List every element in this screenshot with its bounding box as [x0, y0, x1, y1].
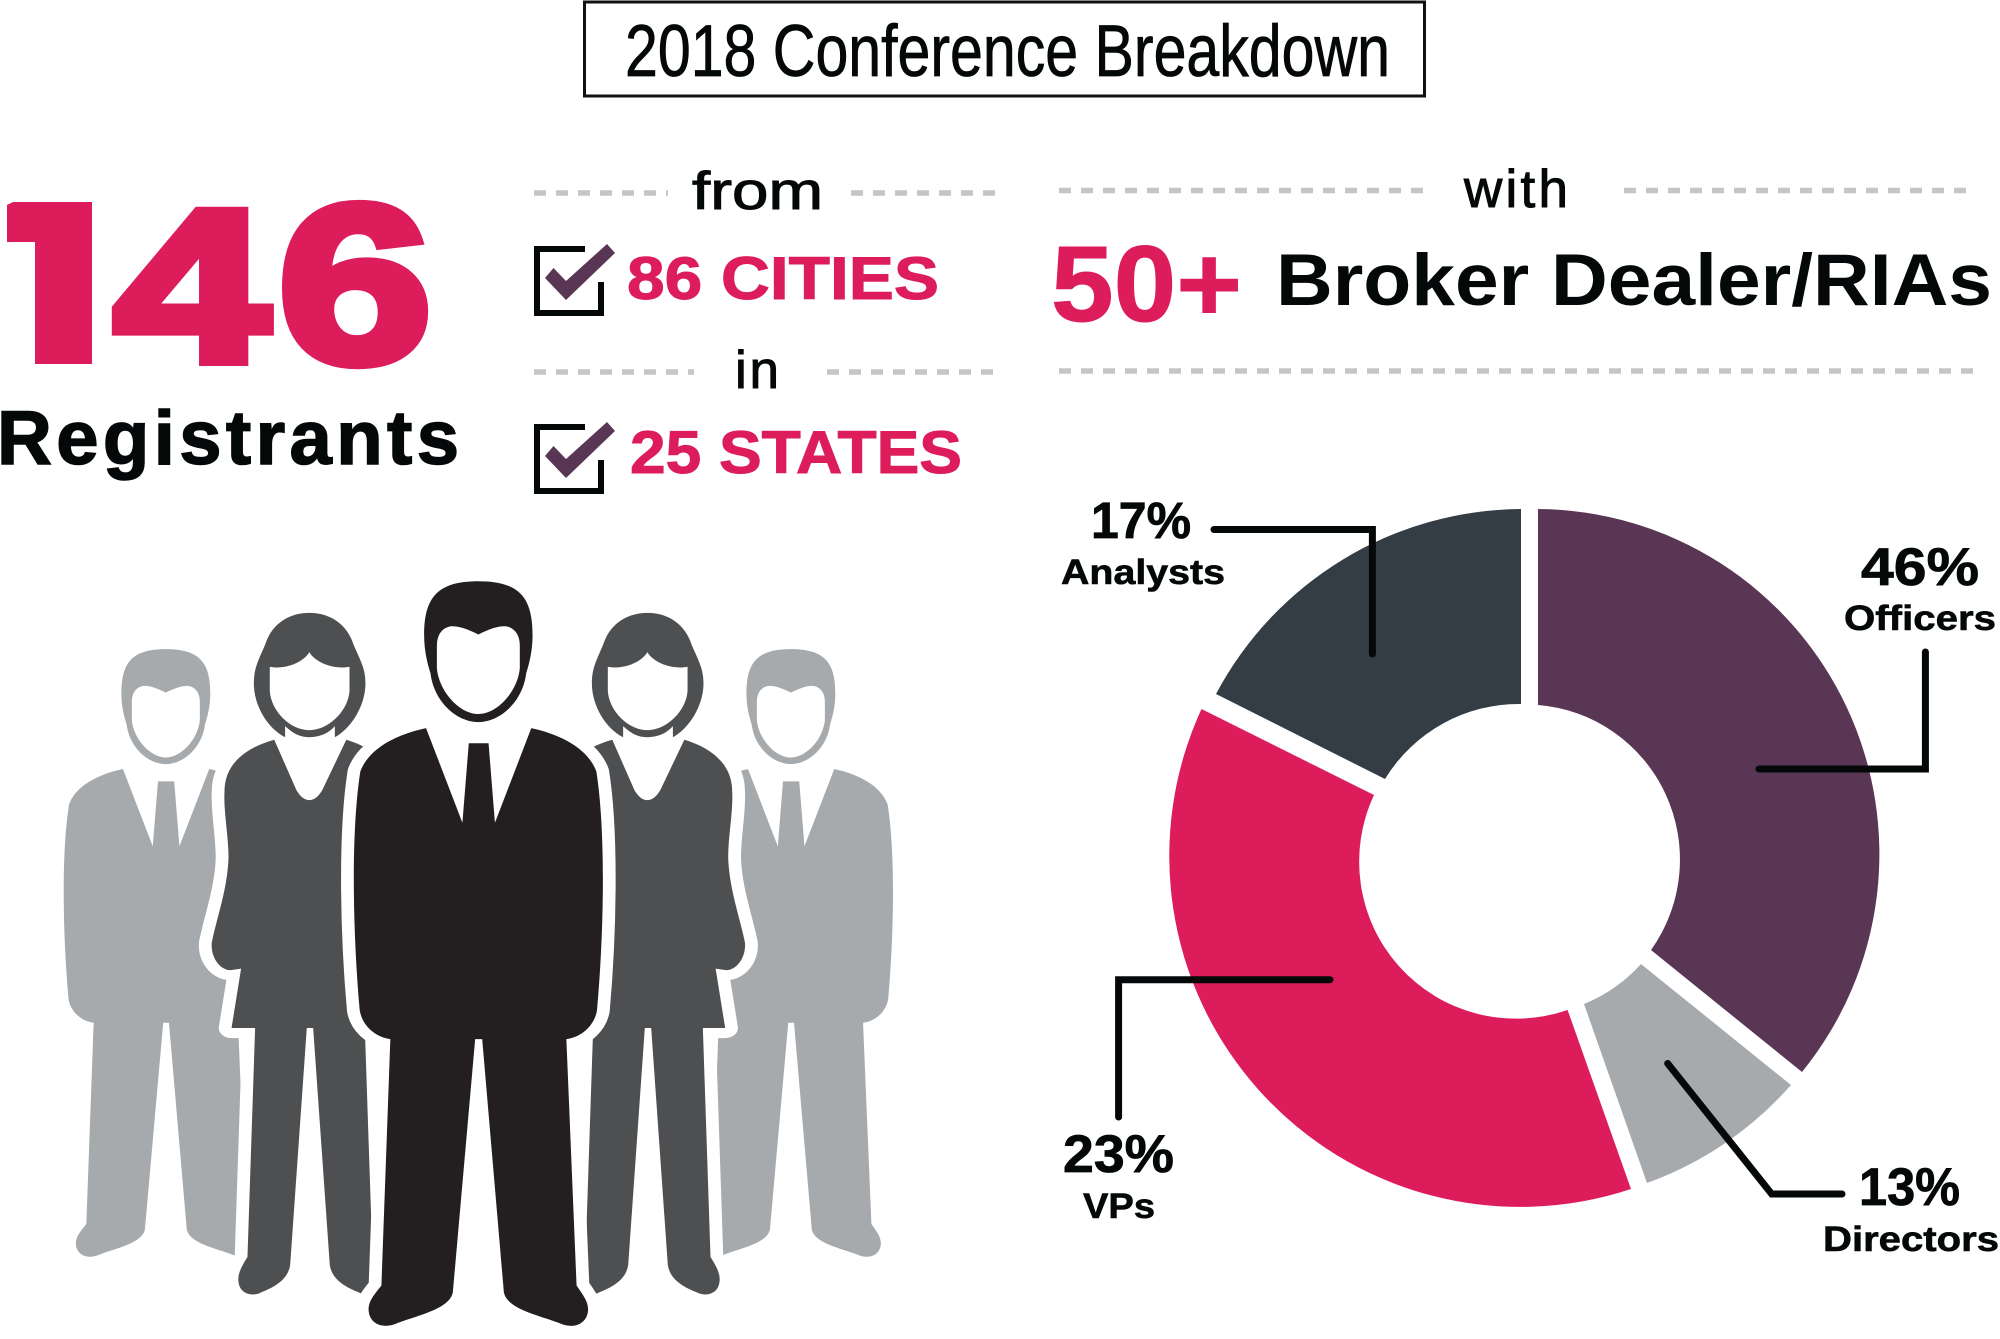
callout line: analysts [1214, 530, 1372, 654]
label: 46% officers [1844, 538, 1996, 638]
text: from: from [692, 162, 823, 221]
label: 23% vps [1063, 1125, 1174, 1226]
segment: vps [1169, 709, 1631, 1207]
text: with: with [1463, 160, 1568, 219]
stat: 86 cities: 86 CITIES [627, 245, 939, 312]
dashed divider: lower [1059, 368, 1976, 374]
label: 17% analysts: 17% [1091, 492, 1191, 549]
person: left woman [212, 613, 407, 1294]
stat: 146 registrants: Registrants [0, 396, 459, 481]
icon: group of business people [64, 581, 893, 1326]
label: 13% directors: Directors [1823, 1220, 1999, 1259]
label: 23% vps: 23% [1063, 1125, 1174, 1184]
dashed divider: from [534, 190, 1001, 196]
person: right woman [550, 613, 745, 1294]
label: 23% vps: VPs [1083, 1187, 1155, 1226]
icon: checkbox states [537, 422, 615, 491]
stat: 146 registrants [1, 200, 457, 481]
label: 13% directors: 13% [1859, 1158, 1960, 1217]
segment: directors [1584, 964, 1791, 1183]
donut chart [1061, 492, 1999, 1259]
label: 46% officers: 46% [1861, 538, 1979, 597]
segment: officers [1538, 509, 1879, 1072]
callout line: officers [1759, 652, 1925, 769]
segment: analysts [1216, 509, 1521, 779]
stat: 146 registrants: 6 [278, 158, 432, 410]
person: center man [354, 581, 603, 1326]
icon: checkbox cities [537, 244, 615, 313]
label: 17% analysts [1061, 492, 1225, 592]
label: 17% analysts: Analysts [1061, 553, 1225, 592]
person: back right man [689, 649, 893, 1257]
person: back left man [64, 649, 268, 1257]
stat: 50+: 50+ [1051, 223, 1242, 344]
callout line: vps [1119, 980, 1330, 1117]
text: in: in [735, 341, 779, 400]
stat: 25 states: 25 STATES [630, 419, 962, 486]
dashed divider: in [534, 369, 997, 375]
title: 2018 Conference Breakdown [625, 11, 1390, 92]
callout line: directors [1668, 1064, 1842, 1194]
label: 13% directors [1823, 1158, 1999, 1259]
stat: 146 registrants: 4 [114, 165, 269, 407]
label: 46% officers: Officers [1844, 599, 1996, 638]
dashed divider: with [1059, 188, 1976, 193]
stat label: broker dealer: Broker Dealer/RIAs [1276, 240, 1992, 321]
